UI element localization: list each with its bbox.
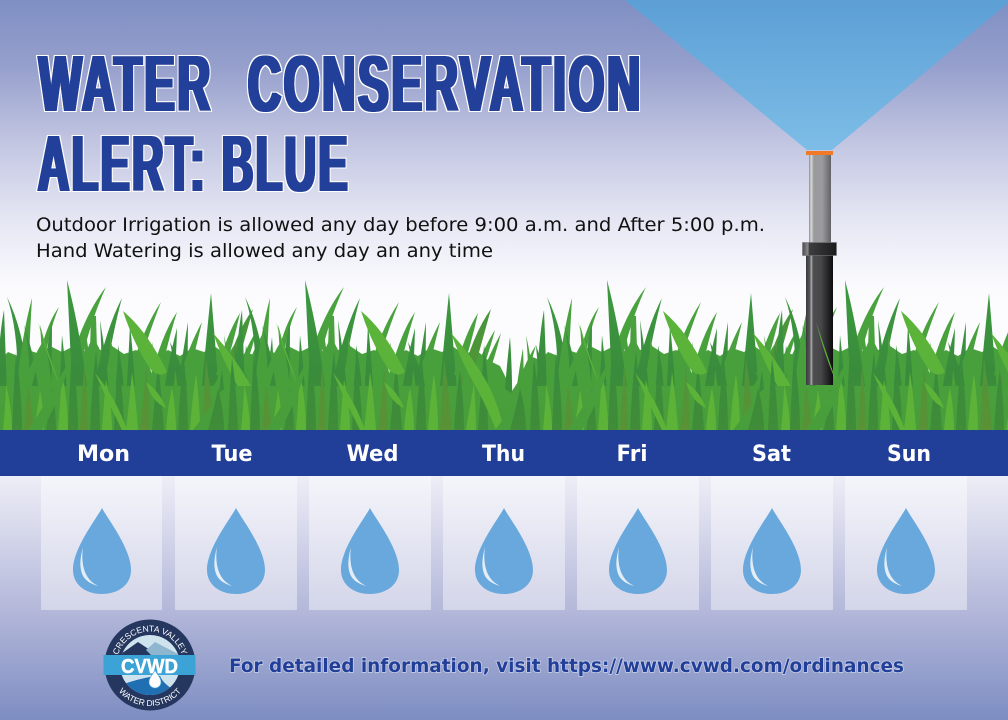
grass back layer: [0, 280, 1008, 430]
day labels: Wed: [346, 442, 398, 467]
logo: Crescenta Valley Water District: [104, 620, 196, 710]
day header band: [0, 430, 1008, 476]
title: WATER: [39, 39, 213, 128]
logo: Crescenta Valley Water District: WATER DISTRICT: [120, 687, 180, 706]
card: Saturday: [711, 476, 833, 610]
sprinkler collar: [802, 242, 836, 256]
title: CONSERVATION: [248, 39, 643, 128]
card: Friday: [577, 476, 699, 610]
title: ALERT: BLUE: [38, 119, 350, 208]
day labels: Tue: [212, 442, 252, 467]
day cards with water drops: [41, 476, 967, 610]
day labels: Thu: [482, 442, 525, 467]
irrigation rules text: [36, 214, 765, 262]
spray cone: [625, 0, 1008, 150]
card: Thursday: [443, 476, 565, 610]
day labels: Mon: [77, 442, 130, 467]
day labels: Fri: [616, 442, 648, 467]
sprinkler orange nozzle: [806, 151, 833, 155]
sprinkler riser: [809, 155, 831, 243]
logo: Crescenta Valley Water District: CRESCENTA VALLEY: [113, 626, 188, 654]
day labels: Sat: [752, 442, 791, 467]
irrigation rules text: Outdoor Irrigation is allowed any day before 9:00 a.m. and After 5:00 p.m.: [36, 214, 765, 236]
sprinkler body: [806, 255, 833, 385]
day labels: [77, 442, 931, 467]
card: Monday: [41, 476, 162, 610]
card: Sunday: [845, 476, 967, 610]
card: Wednesday: [309, 476, 431, 610]
day labels: Sun: [887, 442, 931, 467]
footer link text: For detailed information, visit https://www.cvwd.com/ordinances: [229, 655, 904, 677]
logo: Crescenta Valley Water District: CVWD: [121, 656, 178, 678]
card: Tuesday: [175, 476, 297, 610]
sprinkler: [802, 151, 836, 385]
title: [38, 39, 643, 208]
irrigation rules text: Hand Watering is allowed any day an any time: [36, 240, 493, 262]
grass front layer: [0, 311, 1008, 430]
